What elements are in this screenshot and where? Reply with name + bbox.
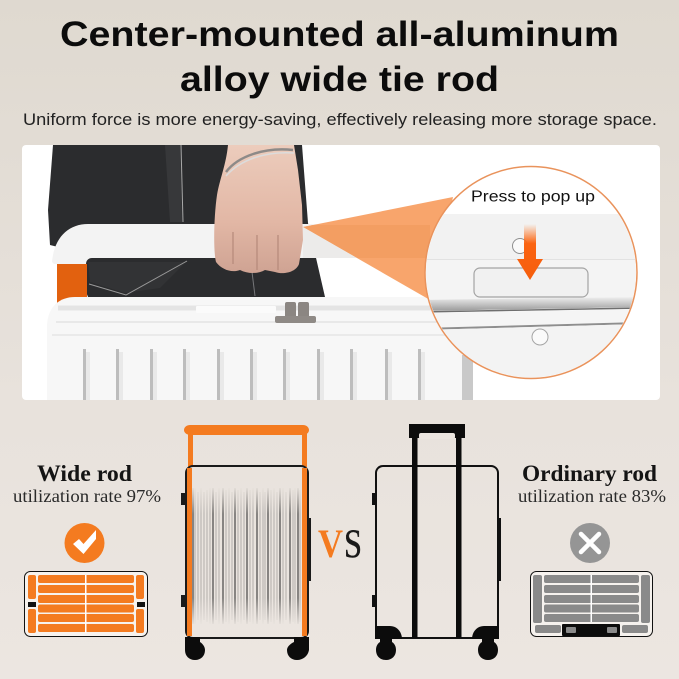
diagram: ordinary rod suitcase — [372, 424, 501, 660]
heading: ordinary rod: Ordinary rod — [522, 461, 657, 486]
diagram: ordinary rod packing layout — [530, 572, 652, 636]
callout beam — [303, 197, 453, 300]
text: utilization 83%: utilization rate 83% — [518, 486, 666, 506]
photo: orange rod — [57, 264, 87, 303]
callout label: Press to pop up — [471, 188, 595, 206]
vs label: S — [344, 521, 362, 566]
panel: wide rod — [13, 425, 311, 660]
title: Center-mounted all-aluminum — [60, 15, 619, 54]
vs label: V — [318, 521, 343, 566]
panel: product photo — [22, 145, 660, 400]
title: alloy wide tie rod — [180, 60, 499, 99]
photo: jeans — [48, 145, 325, 297]
photo: hand — [214, 145, 303, 273]
diagram: wide rod suitcase — [181, 425, 311, 660]
subtitle: Uniform force is more energy-saving, effectively releasing more storage space. — [23, 111, 657, 129]
heading: wide rod: Wide rod — [37, 461, 132, 486]
photo: white handle — [52, 224, 322, 264]
title — [60, 15, 619, 99]
diagram: wide rod packing layout — [24, 572, 148, 636]
suitcase shell stripes — [193, 488, 300, 624]
icon: cross badge — [570, 523, 610, 563]
vs label — [318, 521, 362, 566]
photo: white suitcase — [47, 297, 473, 400]
icon: check badge — [64, 523, 104, 563]
photo: zipper pulls — [275, 302, 316, 323]
text: utilization 97%: utilization rate 97% — [13, 486, 161, 506]
panel: ordinary rod — [372, 424, 666, 660]
icon: press arrow — [517, 224, 543, 280]
callout: magnified lens — [420, 166, 642, 391]
